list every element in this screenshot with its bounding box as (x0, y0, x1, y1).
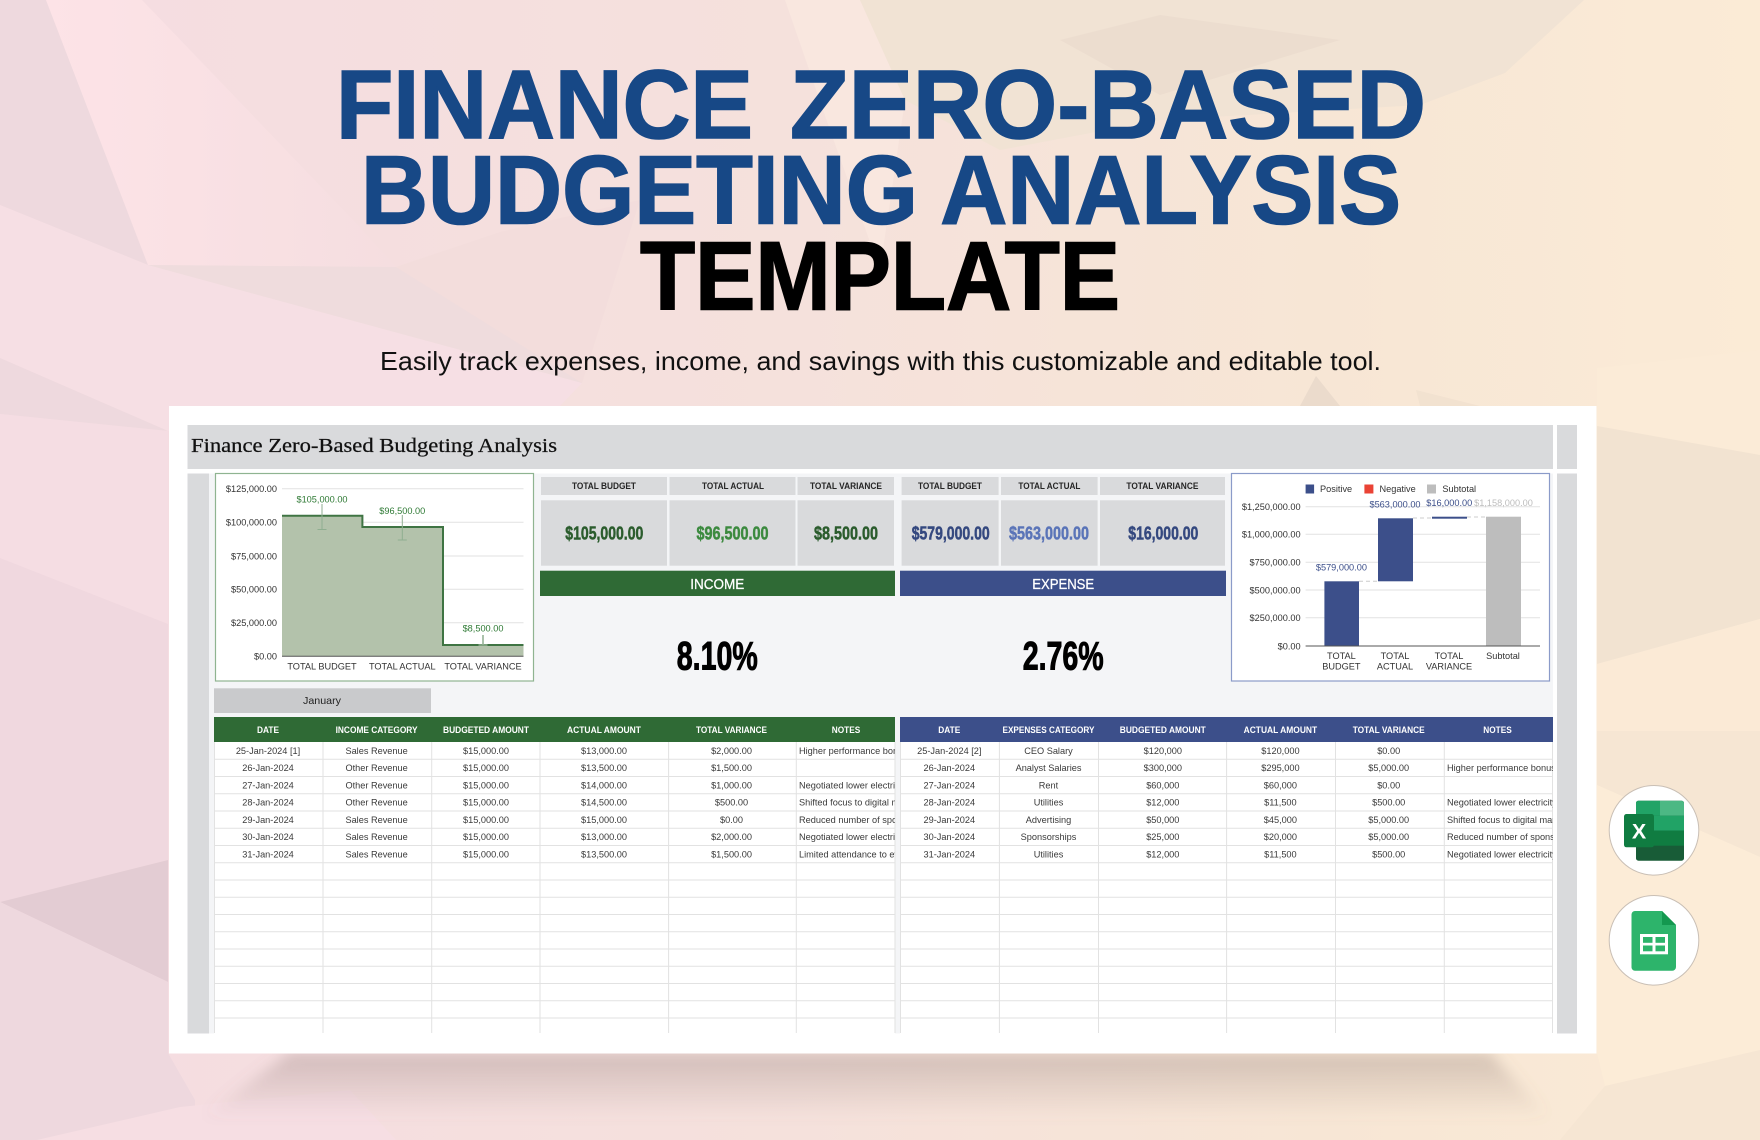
expense table notes: Reduced number of sponsors (1447, 832, 1568, 842)
month selector (214, 688, 431, 713)
expense table rows: $500.00 (1372, 798, 1405, 808)
income table rows: $1,500.00 (711, 763, 752, 773)
income table rows: Sales Revenue (345, 746, 408, 756)
expense table rows: $500.00 (1372, 850, 1405, 860)
chart legend (1306, 484, 1476, 494)
KPI group: expense totals: $16,000.00 (1128, 522, 1198, 544)
income table rows: $13,500.00 (581, 850, 627, 860)
expense table rows: Rent (1039, 780, 1059, 790)
expense table rows: Utilities (1034, 798, 1064, 808)
income table rows: Other Revenue (345, 798, 408, 808)
month selector: January (303, 695, 342, 707)
chart: expense waterfall: $250,000.00 (1250, 613, 1301, 623)
expense table header (938, 725, 1512, 735)
expense table header: BUDGETED AMOUNT (1120, 725, 1206, 735)
expense table rows: $50,000 (1146, 815, 1179, 825)
income table rows: 30-Jan-2024 (242, 832, 294, 842)
sheet title bar (188, 425, 1553, 469)
chart: expense waterfall: $16,000.00 (1426, 498, 1472, 508)
income table rows: $13,500.00 (581, 763, 627, 773)
KPI banner: income (540, 571, 895, 596)
income table notes: Reduced number of sponsors (799, 815, 920, 825)
income table rows: $1,000.00 (711, 780, 752, 790)
expense table notes: Higher performance bonuses (1447, 763, 1566, 773)
KPI group: expense totals (902, 477, 1225, 566)
expense table header: DATE (938, 725, 960, 735)
chart: income step area: $8,500.00 (463, 624, 503, 634)
income table rows: 28-Jan-2024 (242, 798, 294, 808)
expense table rows: $45,000 (1264, 815, 1297, 825)
income table rows: 31-Jan-2024 (242, 850, 294, 860)
table: income (214, 717, 932, 1034)
KPI group: income totals: TOTAL ACTUAL (702, 481, 764, 491)
chart: expense waterfall: ACTUAL (1377, 661, 1413, 671)
income table rows: $500.00 (715, 798, 748, 808)
income table header: INCOME CATEGORY (336, 725, 418, 735)
sheet content background (209, 474, 1553, 1034)
chart: expense waterfall: $579,000.00 (1316, 562, 1367, 572)
income table rows: $2,000.00 (711, 746, 752, 756)
chart: income step area: $50,000.00 (231, 585, 277, 595)
income table header: NOTES (832, 725, 860, 735)
expense table header: ACTUAL AMOUNT (1244, 725, 1318, 735)
income table rows: $15,000.00 (463, 798, 509, 808)
income table rows: $15,000.00 (463, 815, 509, 825)
chart: income step area: TOTAL BUDGET (287, 661, 357, 671)
expense table header: NOTES (1483, 725, 1512, 735)
income table rows (236, 746, 752, 860)
card shadow (200, 1053, 1550, 1118)
income table rows: $15,000.00 (463, 763, 509, 773)
chart: expense waterfall: $563,000.00 (1369, 499, 1421, 509)
KPI banner: expense (900, 571, 1226, 596)
chart: expense waterfall: TOTAL (1327, 651, 1356, 661)
income table rows: 26-Jan-2024 (242, 763, 294, 773)
expense table rows: 31-Jan-2024 (924, 850, 975, 860)
chart: expense waterfall: $1,000,000.00 (1242, 530, 1301, 540)
expense table rows: $12,000 (1146, 798, 1179, 808)
expense table rows: $60,000 (1264, 780, 1297, 790)
income table rows: $0.00 (720, 815, 743, 825)
chart: income step area (216, 474, 534, 681)
chart: income step area: $100,000.00 (226, 518, 277, 528)
title: TEMPLATE (640, 221, 1120, 331)
expense table notes: Negotiated lower electricity (1447, 798, 1557, 808)
chart: expense waterfall: TOTAL (1435, 651, 1463, 661)
income table rows: $14,500.00 (581, 798, 627, 808)
icon: Excel: X (1632, 820, 1647, 844)
income table header: BUDGETED AMOUNT (443, 725, 529, 735)
income table rows: $13,000.00 (581, 746, 627, 756)
income table notes: Negotiated lower electricity (799, 832, 909, 842)
expense table rows: $20,000 (1264, 832, 1297, 842)
chart legend: Positive (1320, 484, 1352, 494)
chart legend: Negative (1380, 484, 1416, 494)
income table rows: $2,000.00 (711, 832, 752, 842)
income table header (257, 725, 860, 735)
chart: income step area: $0.00 (254, 652, 277, 662)
expense table rows: $5,000.00 (1368, 763, 1409, 773)
chart: income step area: $125,000.00 (226, 484, 277, 494)
expense table rows: $25,000 (1146, 832, 1179, 842)
income table rows: $13,000.00 (581, 832, 627, 842)
expense table notes: Negotiated lower electricity (1447, 850, 1557, 860)
KPI group: income totals: $105,000.00 (565, 522, 643, 544)
income table rows: $15,000.00 (463, 780, 509, 790)
KPI percentage: income: 8.10% (677, 634, 758, 679)
expense table rows: Analyst Salaries (1016, 763, 1082, 773)
KPI group: income totals (541, 477, 894, 566)
expense table rows: 30-Jan-2024 (924, 832, 975, 842)
KPI group: income totals: TOTAL BUDGET (572, 481, 636, 491)
subtitle: Easily track expenses, income, and savings with this customizable and editable tool. (380, 346, 1381, 376)
income table rows: $15,000.00 (463, 746, 509, 756)
icon: Google Sheets (1609, 896, 1699, 985)
income table rows: $1,500.00 (711, 850, 752, 860)
KPI group: income totals: $96,500.00 (696, 522, 768, 544)
expense table header: EXPENSES CATEGORY (1002, 725, 1094, 735)
KPI group: expense totals: TOTAL BUDGET (918, 481, 982, 491)
income table rows: 27-Jan-2024 (242, 780, 294, 790)
chart: expense waterfall: $1,158,000.00 (1474, 498, 1533, 508)
expense table rows (917, 746, 1409, 860)
income table notes: Higher performance bonuses (799, 746, 918, 756)
KPI group: expense totals: $563,000.00 (1009, 522, 1089, 544)
income table rows: Sales Revenue (345, 815, 408, 825)
chart: expense waterfall: VARIANCE (1426, 661, 1472, 671)
expense table rows: $12,000 (1146, 850, 1179, 860)
expense table notes (1448, 764, 1553, 860)
expense table rows: $295,000 (1261, 763, 1300, 773)
chart: income step area: TOTAL VARIANCE (444, 661, 522, 671)
income table notes: Negotiated lower electricity (799, 780, 909, 790)
expense table header: TOTAL VARIANCE (1353, 725, 1425, 735)
expense table rows: $5,000.00 (1368, 832, 1409, 842)
KPI group: income totals: $8,500.00 (814, 522, 878, 544)
income table rows: Sales Revenue (345, 850, 408, 860)
income table notes: Shifted focus to digital marketing (799, 798, 932, 808)
KPI percentage: expense: 2.76% (1023, 634, 1104, 679)
expense table rows: $0.00 (1377, 746, 1400, 756)
expense table rows: 29-Jan-2024 (924, 815, 975, 825)
chart: expense waterfall: $500,000.00 (1250, 585, 1301, 595)
expense table notes: Shifted focus to digital marketing (1447, 815, 1580, 825)
expense table rows: 27-Jan-2024 (924, 780, 975, 790)
title: BUDGETING ANALYSIS (361, 135, 1401, 245)
KPI group: expense totals: TOTAL ACTUAL (1018, 481, 1081, 491)
title (336, 49, 1426, 331)
income table rows: Other Revenue (345, 780, 408, 790)
expense table rows: $60,000 (1146, 780, 1179, 790)
chart: expense waterfall: Subtotal (1486, 651, 1520, 661)
income table rows: $15,000.00 (581, 815, 627, 825)
income table notes: Limited attendance to events (799, 850, 917, 860)
expense table rows: $5,000.00 (1368, 815, 1409, 825)
income table rows: Sales Revenue (345, 832, 408, 842)
sheet side strips (188, 425, 1577, 1034)
chart: income step area: $25,000.00 (231, 618, 277, 628)
chart: expense waterfall: $0.00 (1278, 641, 1301, 651)
expense table rows: $120,000 (1261, 746, 1300, 756)
chart: income step area: TOTAL ACTUAL (369, 661, 436, 671)
KPI banner: income: INCOME (690, 577, 744, 593)
income table rows: 25-Jan-2024 [1] (236, 746, 300, 756)
income table header: ACTUAL AMOUNT (567, 725, 641, 735)
expense table rows: $120,000 (1144, 746, 1182, 756)
chart: expense waterfall: BUDGET (1322, 661, 1361, 671)
KPI group: income totals: TOTAL VARIANCE (810, 481, 882, 491)
expense table rows: Sponsorships (1021, 832, 1077, 842)
chart: expense waterfall (1232, 474, 1550, 681)
chart: income step area: $75,000.00 (231, 551, 277, 561)
chart: expense waterfall: $750,000.00 (1250, 558, 1301, 568)
income table header: DATE (257, 725, 279, 735)
icon: Excel (1609, 786, 1699, 875)
income table header: TOTAL VARIANCE (696, 725, 767, 735)
expense table rows: Utilities (1034, 850, 1064, 860)
sheet title bar: Finance Zero-Based Budgeting Analysis (191, 435, 557, 457)
title: ZERO-BASED (790, 49, 1426, 159)
panel: spreadsheet card (169, 406, 1596, 1054)
chart: income step area: $96,500.00 (379, 506, 425, 516)
KPI banner: expense: EXPENSE (1032, 577, 1094, 593)
expense table rows: $11,500 (1264, 798, 1297, 808)
chart: expense waterfall: $1,250,000.00 (1242, 502, 1301, 512)
KPI group: expense totals: TOTAL VARIANCE (1126, 481, 1198, 491)
income table notes (800, 748, 895, 858)
expense table rows: $300,000 (1144, 763, 1182, 773)
income table rows: $15,000.00 (463, 850, 509, 860)
title: FINANCE (336, 49, 753, 159)
income table rows: $14,000.00 (581, 780, 627, 790)
table: expenses (900, 717, 1580, 1034)
expense table rows: $11,500 (1264, 850, 1297, 860)
chart: expense waterfall: TOTAL (1381, 651, 1409, 661)
income table rows: $15,000.00 (463, 832, 509, 842)
income table rows: 29-Jan-2024 (242, 815, 294, 825)
income table rows: Other Revenue (345, 763, 408, 773)
expense table rows: Advertising (1026, 815, 1071, 825)
chart: income step area: $105,000.00 (296, 495, 348, 505)
expense table rows: $0.00 (1377, 780, 1400, 790)
chart legend: Subtotal (1442, 484, 1476, 494)
expense table rows: 25-Jan-2024 [2] (917, 746, 981, 756)
KPI group: expense totals: $579,000.00 (912, 522, 990, 544)
expense table rows: CEO Salary (1024, 746, 1073, 756)
expense table rows: 28-Jan-2024 (924, 798, 975, 808)
expense table rows: 26-Jan-2024 (924, 763, 975, 773)
